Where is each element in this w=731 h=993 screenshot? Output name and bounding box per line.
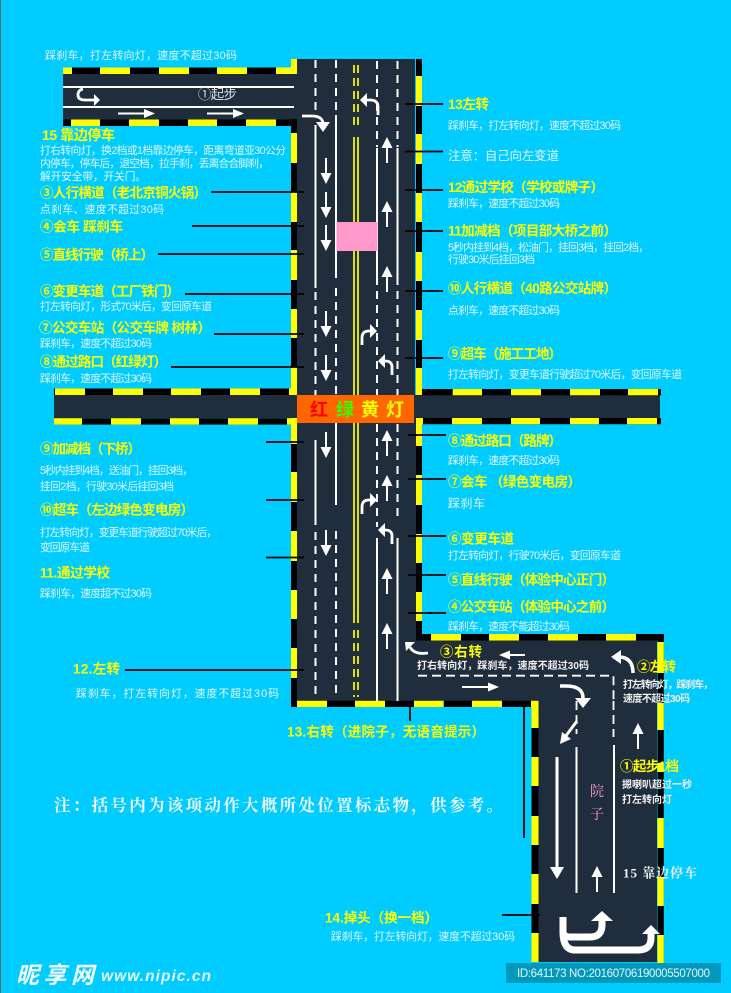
step 7 bus stop: 踩刹车，速度不超过30码 bbox=[40, 336, 152, 350]
traffic light block: 黄 bbox=[361, 399, 379, 420]
step 5 straight: ⑤直线行驶（体验中心正门） bbox=[448, 572, 615, 588]
step 7 bus stop: ⑦公交车站（公交车牌 树林） bbox=[39, 320, 211, 336]
step 4 bus stop bbox=[448, 598, 615, 633]
step 6 change lane bbox=[448, 530, 621, 562]
step 13 left turn: 踩刹车，打左转向灯，速度不超过30码 bbox=[448, 118, 621, 132]
step 10 crosswalk: 点刹车，速度不超过30码 bbox=[448, 303, 560, 317]
step 8 intersection bbox=[448, 432, 562, 467]
step 11 gear change: 行驶30米后挂回3档 bbox=[448, 252, 535, 266]
step 7 meeting: ⑦会车 （绿色变电房） bbox=[448, 474, 581, 490]
step 14 u-turn bbox=[325, 910, 515, 943]
step 8 intersection bbox=[40, 354, 167, 385]
step 3 crosswalk bbox=[40, 184, 207, 216]
step 1 first gear: 摁喇叭超过一秒 bbox=[622, 778, 692, 791]
step 3 crosswalk: 点刹车、速度不超过30码 bbox=[40, 202, 164, 216]
step 12 school: 踩刹车，速度不超过30码 bbox=[448, 196, 560, 210]
step 9 overtake: ⑨超车（施工工地） bbox=[448, 346, 562, 362]
leader lines bbox=[125, 104, 540, 915]
step 12 school bbox=[448, 179, 604, 210]
step 6 change lane bbox=[40, 283, 212, 313]
right column: upper instructions bbox=[448, 96, 682, 381]
step 10 crosswalk bbox=[448, 280, 617, 317]
step 10 overtake: 变回原车道 bbox=[40, 540, 90, 554]
step 11 gear change: 5秒内挂到4档，松油门，挂回3档，挂回2档， bbox=[448, 240, 649, 254]
step 15 pull over: 内停车，停车后，退空档，拉手刹，丢离合合脚刹， bbox=[40, 156, 269, 170]
step 3 right turn: 打右转向灯，踩刹车，速度不超过30码 bbox=[417, 659, 589, 672]
step 3 right turn bbox=[417, 644, 589, 672]
step 9 overtake: 打左转向灯，变更车道行驶超过70米后，变回原车道 bbox=[448, 367, 682, 381]
step 9 gear change: ⑨加减档（下桥） bbox=[40, 440, 141, 456]
step 1 first gear: ①起步1档 bbox=[620, 758, 679, 774]
arrows: straight lane arrows bbox=[118, 109, 644, 892]
step 15 pull over: 解开安全带，开关门。 bbox=[40, 169, 146, 183]
step 7 meeting bbox=[448, 474, 581, 510]
step 4 meeting: ④会车 踩刹车 bbox=[40, 218, 123, 234]
pink bridge block bbox=[336, 222, 378, 251]
step 13 left turn: 13左转 bbox=[448, 96, 490, 112]
step 2 left turn: ②左转 bbox=[637, 658, 676, 674]
step 15 pull over: 15 靠边停车 bbox=[42, 127, 115, 143]
arrows: curved turn arrows bbox=[78, 89, 660, 950]
step 11 school bbox=[40, 564, 152, 600]
step 14 u-turn: 踩刹车，打左转向灯，速度不超过30码 bbox=[331, 929, 515, 943]
step 11 school: 踩刹车，速度超不过30码 bbox=[40, 586, 152, 600]
step 10 overtake bbox=[40, 502, 217, 554]
step 1 start label: ①起步 bbox=[198, 87, 237, 102]
step 8 intersection: 踩刹车，速度不超过30码 bbox=[448, 453, 560, 467]
step 9 overtake bbox=[448, 346, 682, 381]
step 13 left turn bbox=[448, 96, 621, 132]
step 9 gear change: 挂回2档，行驶30米后挂回3档 bbox=[40, 479, 174, 493]
watermark logo: 昵享网 bbox=[16, 962, 97, 988]
step 13 right turn into yard: 13.右转（进院子，无语音提示） bbox=[287, 724, 485, 740]
step 12 left turn bbox=[73, 660, 279, 700]
image id bar bbox=[506, 963, 721, 983]
step 6 change lane: ⑥变更车道 bbox=[448, 530, 514, 546]
step 7 meeting: 踩刹车 bbox=[448, 496, 485, 510]
step 1 first gear bbox=[620, 758, 692, 806]
traffic light block: 红 bbox=[310, 400, 328, 420]
right column: lower instructions bbox=[448, 432, 621, 633]
step 2 left turn: 打左转向灯，踩刹车， bbox=[623, 678, 713, 691]
step 14 u-turn: 14.掉头（换一档） bbox=[325, 910, 438, 926]
double yellow centre line bbox=[354, 65, 358, 697]
step 15 pull over on road: 15 靠边停车 bbox=[623, 866, 697, 880]
step 7 bus stop bbox=[39, 320, 211, 350]
step 6 change lane: 打左转向灯，形式70米后，变回原车道 bbox=[40, 299, 212, 313]
yard label bbox=[590, 784, 604, 823]
on-road labels bbox=[417, 644, 713, 880]
kerb stripes bbox=[54, 59, 664, 963]
step 3 crosswalk: ③人行横道（老北京铜火锅） bbox=[40, 184, 207, 200]
step 1 first gear: 打左转向灯 bbox=[622, 793, 672, 806]
step 8 intersection: 踩刹车，速度不超过30码 bbox=[40, 371, 152, 385]
step 2 left turn: 速度不超过30码 bbox=[623, 692, 690, 705]
step 10 overtake: ⑩超车（左边绿色变电房） bbox=[40, 502, 194, 518]
watermark logo bbox=[16, 962, 211, 988]
step 6 change lane: ⑥变更车道（工厂铁门） bbox=[40, 283, 180, 299]
notice change lane: 注意：自己向左变道 bbox=[448, 148, 559, 163]
step 8 intersection: ⑧通过路口（红绿灯） bbox=[40, 354, 167, 370]
traffic light block: 绿 bbox=[336, 400, 354, 420]
yard label: 子 bbox=[590, 807, 604, 823]
step 4 bus stop: 踩刹车，速度不能超过30码 bbox=[448, 619, 570, 633]
lane markings bbox=[63, 60, 614, 893]
step 12 left turn: 踩刹车，打左转向灯，速度不超过30码 bbox=[76, 686, 279, 700]
left column: lower instructions bbox=[40, 440, 279, 700]
step 2 left turn bbox=[623, 658, 713, 705]
image id bar: ID:641173 NO:20160706190005507000 bbox=[517, 968, 710, 980]
step 15 pull over: 打右转向灯，换2档或1档靠边停车，距离弯道亚30公分 bbox=[40, 143, 286, 157]
step 15 pull over bbox=[40, 127, 286, 183]
step 10 overtake: 打左转向灯，变更车道行驶超过70米后， bbox=[40, 525, 217, 539]
step 8 intersection: ⑧通过路口（路牌） bbox=[448, 432, 562, 448]
road network bbox=[54, 59, 664, 963]
step 12 left turn: 12.左转 bbox=[73, 660, 120, 676]
left column: upper instructions bbox=[39, 127, 286, 385]
step 5 straight: ⑤直线行驶（桥上） bbox=[40, 246, 154, 262]
yard label: 院 bbox=[590, 784, 604, 800]
top note: 踩刹车，打左转向灯，速度不超过30码 bbox=[45, 48, 237, 62]
footnote: 注：括号内为该项动作大概所处位置标志物，供参考。 bbox=[54, 795, 503, 816]
step 10 crosswalk: ⑩人行横道（40路公交站牌） bbox=[448, 280, 617, 296]
traffic light block: 灯 bbox=[386, 400, 404, 420]
step 6 change lane: 打左转向灯，行驶70米后，变回原车道 bbox=[448, 548, 621, 562]
step 11 gear change bbox=[448, 222, 649, 266]
watermark logo: www.nipic.cn bbox=[101, 968, 211, 985]
step 3 right turn: ③右转 bbox=[440, 644, 482, 660]
step 12 school: 12通过学校（学校或牌子） bbox=[448, 179, 604, 195]
step 11 gear change: 11加减档（项目部大桥之前） bbox=[448, 222, 617, 238]
traffic light block bbox=[297, 395, 414, 423]
step 9 gear change: 5秒内挂到4档，送油门，挂回3档， bbox=[40, 463, 193, 477]
step 9 gear change bbox=[40, 440, 193, 493]
step 4 bus stop: ④公交车站（体验中心之前） bbox=[448, 598, 615, 614]
step 11 school: 11.通过学校 bbox=[40, 564, 110, 580]
